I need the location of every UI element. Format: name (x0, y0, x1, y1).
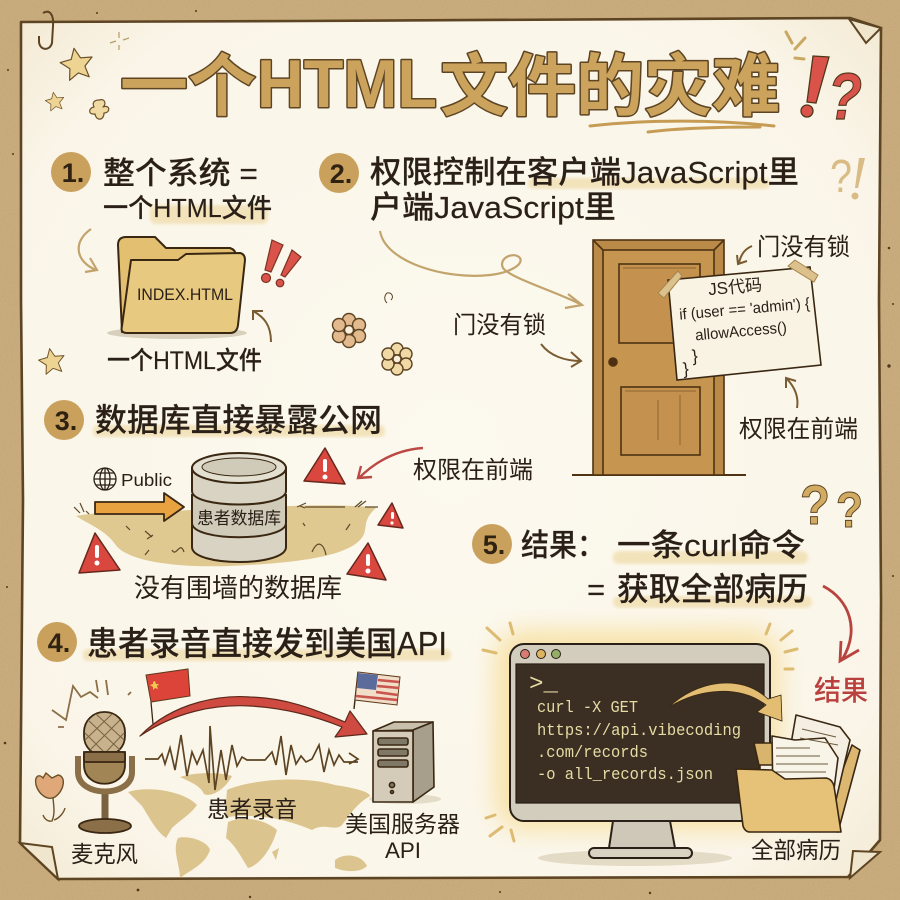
red curved arrow (823, 586, 859, 661)
title: 文件的灾难 (440, 49, 780, 125)
note: JS code: allowAccess() (694, 319, 788, 344)
label: microphone: 麦克风 (71, 841, 138, 867)
title underline (590, 121, 774, 132)
icon: microphone (78, 712, 132, 833)
icon: folder index.html (107, 237, 247, 339)
world map (128, 773, 370, 878)
heading 4: 患者录音直接发到美国API (87, 625, 447, 662)
label: door no lock top: 门没有锁 (757, 234, 850, 261)
sound ticks (52, 680, 131, 727)
heading 1: 整个系统 = (103, 156, 258, 191)
title (120, 46, 780, 125)
terminal text: .com/records (537, 743, 648, 762)
label: door no lock left: 门没有锁 (453, 312, 546, 339)
heading 2 line 1: 权限控制在客户端JavaScript里 (370, 155, 799, 190)
globe icon (94, 468, 116, 490)
heading 5 line 2: = (587, 572, 605, 607)
highlight 1 (150, 205, 268, 224)
highlight 4 (83, 649, 451, 661)
label: US server: 美国服务器 (345, 811, 460, 837)
note: JS code (658, 260, 821, 380)
arrow from left label (541, 344, 581, 367)
icon: paperclip (39, 12, 53, 49)
heading 5 line 2: 获取全部病历 (617, 571, 808, 607)
decorative stars and clover (39, 32, 129, 374)
public label: Public (121, 470, 172, 490)
icon: red exclamation and question (801, 56, 862, 133)
decorative flowers (332, 293, 412, 375)
badge 4: 4. (48, 628, 70, 658)
heading 5 line 1 (521, 528, 805, 563)
red arrow to triangle (358, 448, 423, 478)
arrow to folder from label (253, 311, 271, 342)
label: API: API (385, 838, 421, 863)
badge 3: 3. (55, 406, 77, 436)
glow ticks (483, 623, 797, 841)
terminal text: -o all_records.json (537, 765, 713, 784)
terminal text (529, 671, 741, 784)
question marks: ? (836, 482, 863, 538)
folder caption: 一个HTML文件 (107, 347, 262, 375)
flag: China (146, 669, 190, 724)
badge 1: 1. (62, 158, 84, 188)
badge 1 (51, 152, 91, 192)
note: JS code: JS代码 (707, 275, 763, 299)
label: permission in frontend: 权限在前端 (739, 416, 858, 443)
orange arrow (95, 493, 184, 521)
arrow to note (786, 378, 797, 408)
note: JS code: } (691, 346, 699, 366)
label: patient recording: 患者录音 (207, 796, 297, 822)
section 1 (51, 152, 301, 375)
title: 一个 (120, 49, 256, 125)
icon: database cylinder (192, 453, 286, 562)
curved arrow to folder (79, 229, 97, 272)
monitor glow (495, 630, 780, 830)
badge 2: 2. (330, 159, 352, 189)
section 5 (472, 473, 868, 866)
badge 3 (44, 400, 84, 440)
question marks: ? (800, 473, 830, 536)
sparks near title (786, 32, 805, 59)
section 4 (36, 622, 460, 878)
red arc arrow (140, 697, 367, 737)
heading 5 line 1: 结果： (521, 528, 605, 563)
badge 5: 5. (483, 530, 505, 560)
subheading 1: 一个HTML文件 (103, 193, 272, 223)
section 3 (44, 400, 533, 603)
icon: server tower (369, 722, 441, 804)
heading 3: 数据库直接暴露公网 (95, 402, 382, 438)
section 2 (319, 150, 865, 475)
icon: double exclamation (262, 240, 301, 287)
label: all records: 全部病历 (751, 837, 841, 863)
icon: wooden door (572, 240, 746, 475)
icon: question and exclamation: ? (830, 150, 852, 202)
waveform (145, 726, 358, 790)
label: result: 结果 (814, 675, 868, 706)
icon: database cylinder: 患者数据库 (197, 509, 281, 528)
icon: folder index.html: INDEX.HTML (137, 285, 233, 304)
icon: small flower (36, 773, 65, 821)
flag: USA (354, 672, 400, 709)
title: HTML (257, 46, 437, 122)
icon: red exclamation and question: ? (828, 59, 862, 133)
caption: database no fence: 没有围墙的数据库 (134, 573, 342, 603)
heading 2 line 2: 户端JavaScript里 (370, 190, 616, 225)
arrow from top label (737, 246, 752, 264)
badge 5 (472, 524, 512, 564)
heading 5 line 1: 一条curl命令 (617, 528, 805, 563)
note: JS code: } (682, 359, 690, 379)
icon: folder with records (736, 715, 860, 832)
loop arrow to door (380, 231, 582, 308)
badge 2 (319, 153, 359, 193)
terminal text: >_ (529, 671, 558, 697)
label: permissions: 权限在前端 (413, 457, 533, 484)
terminal text: curl -X GET (537, 698, 638, 717)
badge 4 (37, 622, 77, 662)
question marks (800, 473, 863, 538)
highlight 3 (93, 425, 385, 437)
warning triangles (79, 448, 403, 580)
terminal text: https://api.vibecoding (537, 721, 741, 740)
dry grass patch (74, 501, 378, 566)
icon: computer monitor (510, 644, 770, 866)
yellow arrow to folder (669, 683, 782, 721)
highlight 2 (528, 178, 770, 189)
highlights 5 (613, 551, 812, 608)
note: JS code: if (user == 'admin') { (679, 295, 811, 324)
